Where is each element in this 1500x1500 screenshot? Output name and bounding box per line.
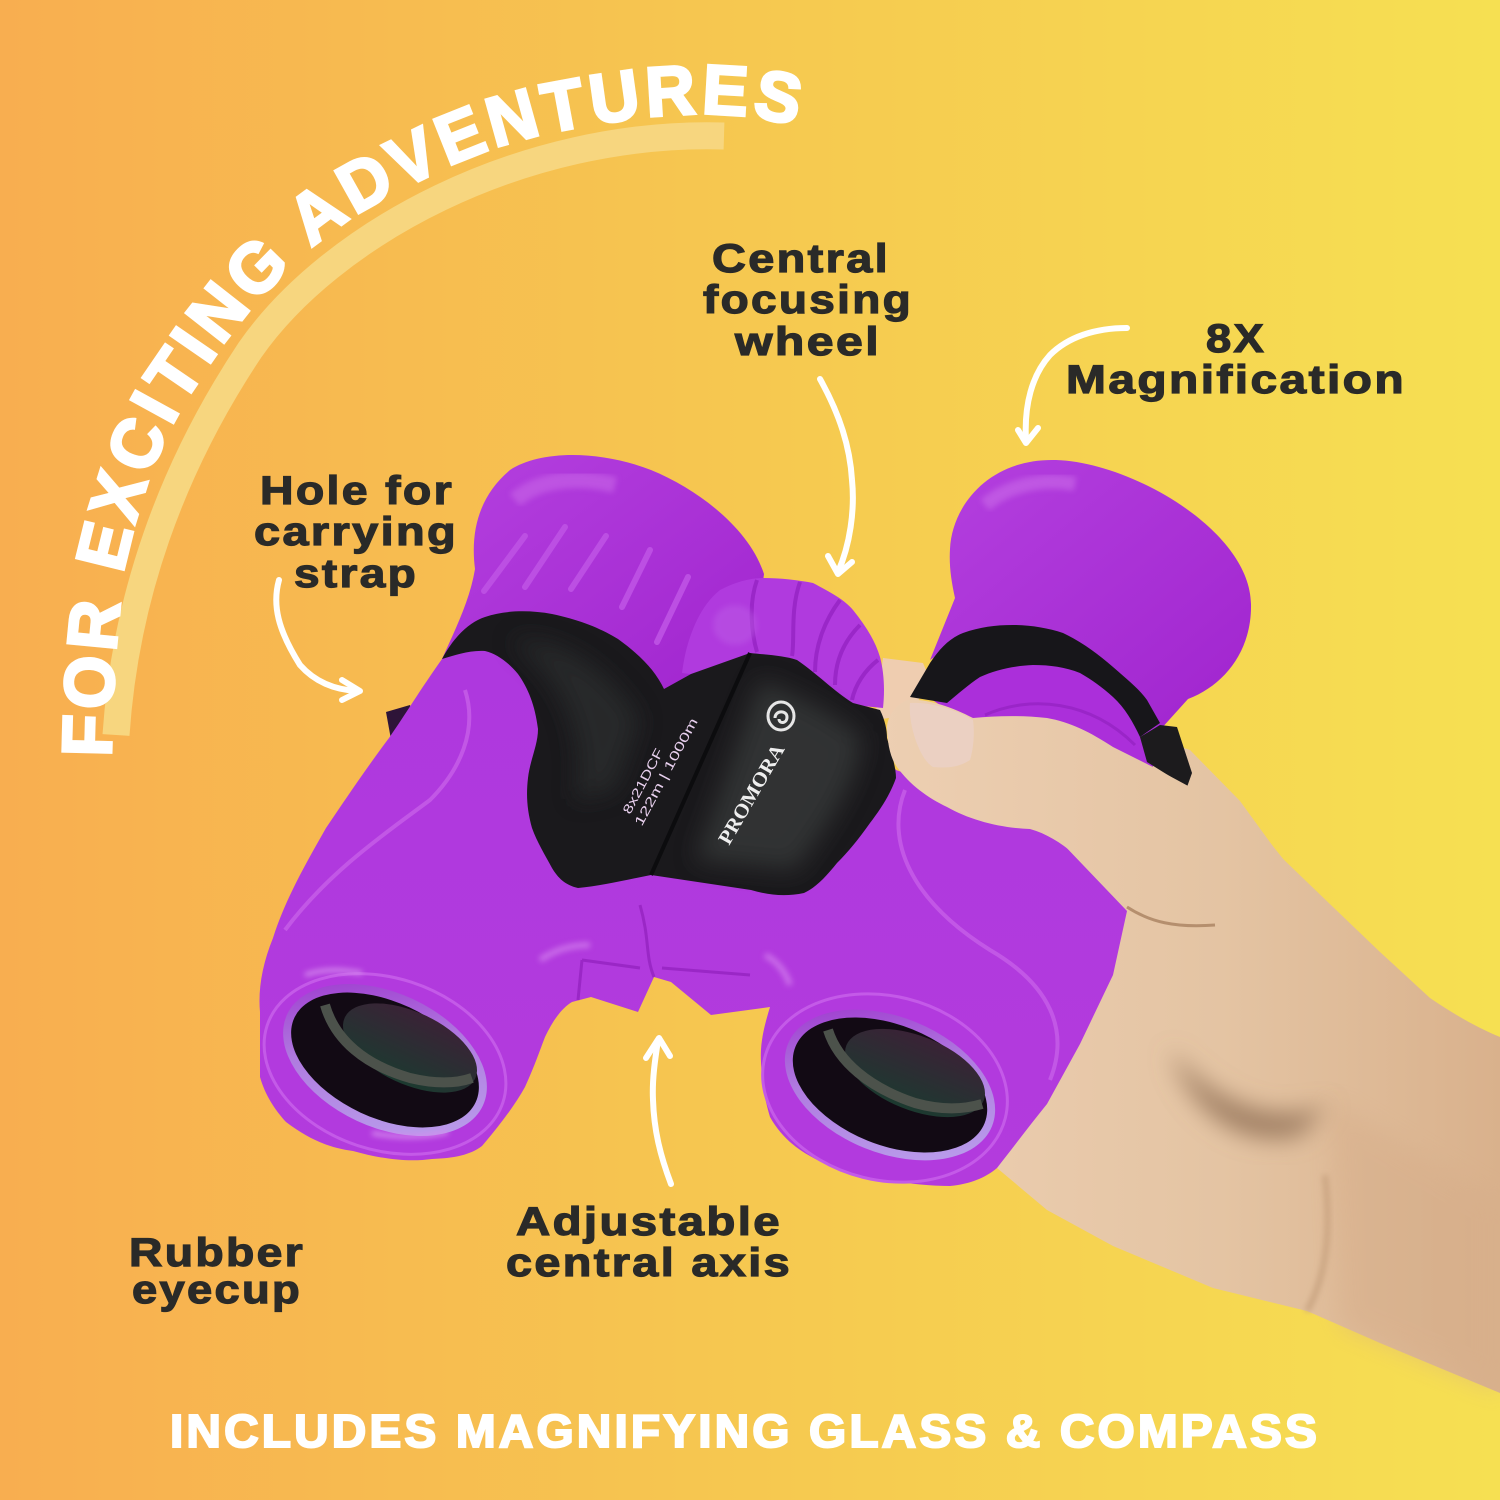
- label: hole for carrying strap: [254, 469, 458, 596]
- curved headline: FOR EXCITING ADVENTURES: [61, 64, 801, 754]
- thumb crease: [1127, 907, 1215, 926]
- black center bridge: [442, 611, 896, 895]
- specs: [617, 708, 701, 828]
- left eyepiece: [442, 455, 764, 700]
- label: central focusing wheel: [703, 237, 913, 364]
- label: 8X magnification: Magnification: [1066, 358, 1406, 402]
- right lens: [773, 991, 1007, 1179]
- specs: 122m | 1000m: [631, 715, 701, 828]
- bridge seam: [651, 653, 750, 875]
- label: hole for carrying strap: strap: [294, 552, 418, 596]
- label: central focusing wheel: Central: [712, 237, 890, 281]
- left rim highlights: [305, 970, 448, 1137]
- label: rubber eyecup: eyecup: [132, 1268, 302, 1312]
- thumb: [887, 700, 1300, 925]
- decorative swoosh under headline: [116, 136, 724, 735]
- strap clip: [1140, 725, 1192, 787]
- focus wheel: [682, 578, 884, 708]
- label: hole for carrying strap: carrying: [254, 510, 458, 554]
- footer text: INCLUDES MAGNIFYING GLASS & COMPASS: [170, 1405, 1320, 1457]
- label: 8X magnification: 8X: [1206, 317, 1266, 361]
- arrow: to focusing wheel: [820, 379, 853, 574]
- arrow: to central axis: [646, 1038, 671, 1184]
- right objective: [742, 969, 1028, 1207]
- wrist crease: [1307, 1175, 1328, 1311]
- label: hole for carrying strap: Hole for: [260, 469, 454, 513]
- body: [260, 640, 1127, 1186]
- right eyecup highlight: [985, 482, 1075, 505]
- label: adjustable central axis: [506, 1200, 792, 1285]
- right eyepiece band: [910, 625, 1160, 737]
- arrow: to strap hole: [276, 580, 360, 700]
- brand name: PROMORA: [714, 740, 790, 848]
- label: 8X magnification: [1066, 317, 1406, 402]
- hand: [997, 740, 1500, 1393]
- label: rubber eyecup: [129, 1231, 305, 1312]
- label: adjustable central axis: Adjustable: [516, 1200, 782, 1244]
- thumbnail: [910, 703, 974, 767]
- right barrel step: [985, 704, 1135, 745]
- left eyepiece highlight: [515, 480, 615, 500]
- arrow: to magnification: [1018, 328, 1127, 443]
- left objective: [240, 944, 530, 1184]
- label: central focusing wheel: focusing: [703, 278, 913, 322]
- strap lug: [386, 705, 420, 745]
- label: adjustable central axis: central axis: [506, 1241, 792, 1285]
- binoculars: [240, 455, 1251, 1207]
- right eyecup: [930, 460, 1251, 730]
- label: central focusing wheel: wheel: [734, 320, 881, 364]
- left eyepiece ribs: [484, 527, 688, 642]
- label: rubber eyecup: Rubber: [129, 1231, 305, 1275]
- right eyepiece barrel: [925, 640, 1165, 775]
- palm shadow: [1170, 1050, 1330, 1138]
- body contour lines: [285, 690, 1058, 1080]
- bridge panel shading: [695, 680, 860, 870]
- finger behind binoculars: [875, 658, 930, 720]
- left lens: [270, 965, 500, 1155]
- body highlights: [540, 945, 790, 985]
- logo: [768, 702, 794, 730]
- specs: 8x21DCF: [619, 746, 666, 816]
